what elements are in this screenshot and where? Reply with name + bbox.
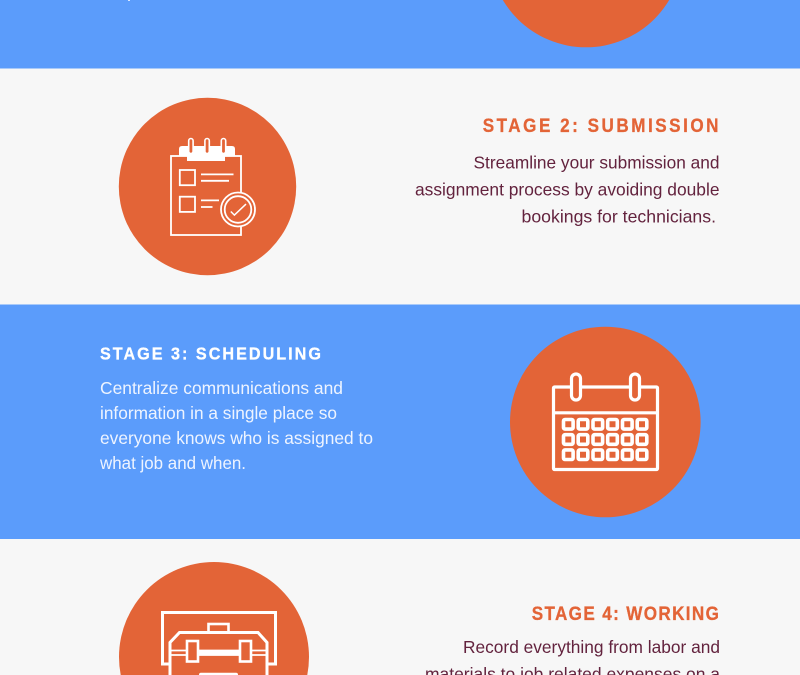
text block: stage 3 description (99, 378, 373, 473)
text block: stage 3 description: information in a single place so (100, 403, 337, 423)
text block: stage 3 description: Centralize communications and (100, 378, 343, 398)
panel: stage 2 submission (0, 68, 800, 304)
panel: stage 3 scheduling (0, 304, 800, 539)
text block: stage 4 description: Record everything from labor and (463, 637, 720, 657)
heading: stage 2: STAGE 2: SUBMISSION (483, 115, 719, 136)
heading: stage 3: STAGE 3: SCHEDULING (100, 344, 321, 364)
heading: stage 4: STAGE 4: WORKING (532, 603, 719, 624)
text block: stage 2 description (415, 152, 720, 226)
text block: stage 2 description: assignment process by avoiding double (415, 180, 720, 200)
icon: toolbox (119, 562, 309, 675)
panel: stage 4 working (0, 539, 800, 675)
text block: stage 3 description: everyone knows who is assigned to (100, 428, 373, 448)
text block: stage 2 description: Streamline your submission and (474, 152, 720, 172)
icon: calendar (510, 327, 701, 517)
text block: stage 3 description: what job and when. (99, 453, 246, 473)
text block: stage 4 description (425, 637, 720, 675)
icon: clipboard checklist (119, 98, 296, 275)
text block: stage 2 description: bookings for technicians. (522, 206, 716, 226)
panel: stage 1 (cropped) (0, 0, 800, 68)
icon: stage 1 orange circle (489, 0, 683, 47)
